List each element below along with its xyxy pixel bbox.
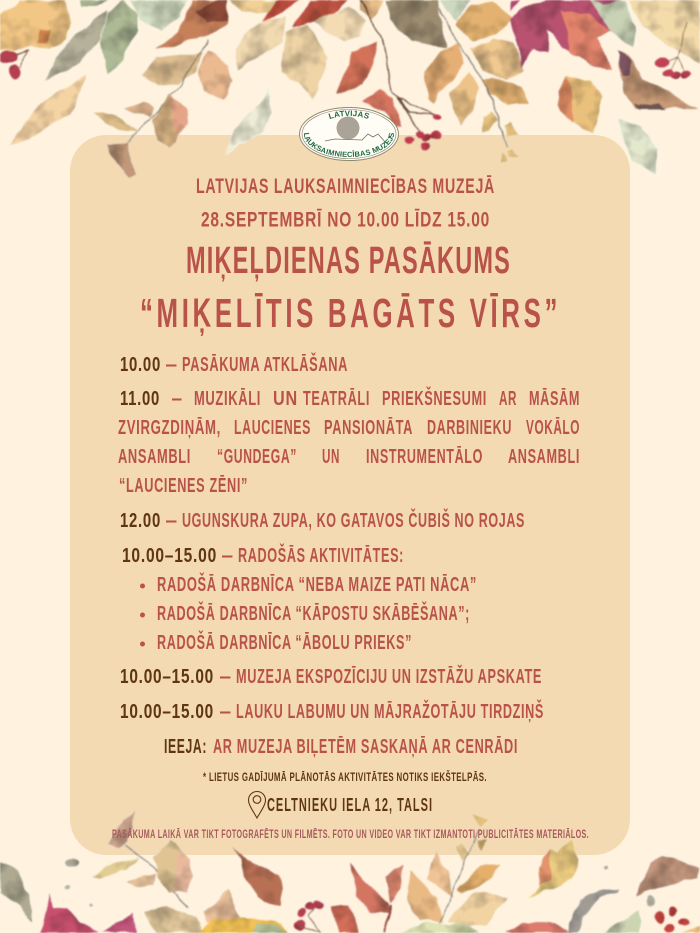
leaf: yellow red autumn — [552, 63, 602, 135]
decoration: top autumn leaves — [0, 0, 700, 177]
leaf: round on stem — [152, 95, 188, 148]
leaf: yellow bottom right — [528, 840, 578, 898]
leaf: rust — [155, 0, 228, 48]
leaf: green bottom right — [603, 912, 642, 933]
paint spots — [65, 859, 656, 908]
pumpkin: red — [503, 922, 567, 933]
programme item: 10.00 opening: — — [166, 354, 177, 376]
entry information: IEEJA: — [164, 736, 207, 758]
leaf: pale green right — [618, 118, 657, 175]
leaf: pink tan over panel — [107, 810, 135, 847]
programme item: 11.00 performances: DARBINIEKU — [427, 417, 512, 439]
leaf: sage green — [100, 0, 137, 75]
programme item: market: 10.00–15.00 — [120, 701, 214, 723]
stem: bottom left — [125, 843, 187, 908]
leaf: orange cluster — [455, 2, 513, 42]
programme item: 11.00 performances: — — [172, 388, 182, 410]
bullet list: workshops: RADOŠĀ DARBNĪCA “NEBA MAIZE PATI NĀCA” — [157, 572, 477, 596]
logo: museum emblem — [299, 107, 399, 161]
berries: bottom right — [656, 905, 688, 931]
stem: right branch — [440, 10, 507, 147]
programme item: 11.00 performances: PANSIONĀTA — [324, 417, 413, 439]
stem: centre branch — [360, 0, 433, 130]
leaf: tan top centre — [360, 0, 383, 18]
leaf: pale yellow left — [10, 75, 87, 147]
programme item: 11.00 performances: UN — [322, 446, 340, 468]
leaf: tan on stem — [143, 52, 202, 87]
leaf: pale green right of centre — [440, 0, 472, 20]
programme item: 10.00 opening: PASĀKUMA ATKLĀŠANA — [182, 352, 348, 376]
stem and berries: top right — [662, 23, 687, 75]
leaf: grey green bottom left — [0, 862, 33, 923]
programme item: 11.00 performances: TEATRĀLI — [303, 388, 370, 410]
leaf: brown purple — [230, 847, 283, 907]
programme item: market: — — [220, 701, 231, 723]
leaf: cream maple — [230, 0, 277, 13]
bullet list: workshops: RADOŠĀ DARBNĪCA “ĀBOLU PRIEKS” — [157, 630, 412, 654]
rain note: * LIETUS GADĪJUMĀ PLĀNOTĀS AKTIVITĀTES NOTIKS IEKŠTELPĀS. — [203, 769, 487, 784]
panel: programme background — [70, 135, 630, 855]
programme item: creative activities — [122, 543, 477, 654]
leaf: brown bottom right — [635, 855, 700, 896]
leaf: grey green — [45, 10, 107, 82]
leaf: tan bottom centre — [143, 905, 203, 933]
heading: date: 28.SEPTEMBRĪ NO 10.00 LĪDZ 15.00 — [201, 208, 490, 232]
programme item: 11.00 performances: 11.00 — [120, 388, 160, 410]
programme item: 11.00 performances: VOKĀLO — [526, 417, 580, 439]
programme item: 11.00 performances: MUZIKĀLI — [194, 388, 261, 410]
programme item: 11.00 performances: LAUCIENES — [234, 417, 311, 439]
pumpkin: yellow — [197, 917, 290, 933]
programme item: 11.00 performances: MĀSĀM — [529, 388, 580, 410]
leaf: magenta maple — [510, 0, 613, 70]
programme item: creative activities: 10.00–15.00 — [122, 545, 217, 567]
leaf: big pale orange right — [627, 0, 700, 63]
address: CELTNIEKU IELA 12, TALSI — [267, 795, 433, 815]
decoration: bottom autumn leaves — [0, 810, 700, 933]
leaf: brown small — [107, 143, 135, 177]
programme item: exhibitions — [120, 664, 542, 688]
programme item: 10.00 opening — [120, 352, 348, 376]
leaf: round bottom — [153, 840, 193, 893]
programme item: exhibitions: 10.00–15.00 — [120, 666, 214, 688]
programme item: 11.00 performances: INSTRUMENTĀLO — [366, 446, 483, 468]
berries: centre — [404, 114, 441, 150]
pumpkin: pale green — [400, 923, 480, 933]
programme item: exhibitions: — — [220, 666, 231, 688]
programme item: 11.00 performances — [118, 386, 580, 497]
berries: top left — [0, 52, 20, 80]
programme item: 11.00 performances: ANSAMBLI — [508, 446, 580, 468]
leaf: red top — [263, 0, 300, 22]
programme item: 11.00 performances: “GUNDEGA” — [217, 446, 297, 468]
programme item: 10.00 opening: 10.00 — [120, 354, 161, 376]
stem: bottom cluster — [440, 830, 478, 923]
programme item: 11.00 performances: AR — [499, 388, 517, 410]
programme item: 11.00 performances: “LAUCIENES ZĒNI” — [119, 475, 248, 497]
logo: arched name top: LATVIJAS — [328, 110, 370, 119]
programme item: creative activities: RADOŠĀS AKTIVITĀTES: — [238, 543, 404, 567]
bullet list: workshops: RADOŠĀ DARBNĪCA “KĀPOSTU SKĀBĒŠANA”; — [157, 601, 470, 625]
leaf: small tan — [93, 113, 140, 132]
programme item: 11.00 performances: PRIEKŠNESUMI — [382, 386, 487, 410]
programme item: 11.00 performances: UN — [273, 388, 298, 410]
leaf: red hanging — [337, 42, 377, 93]
programme item: 12.00 soup: — — [166, 510, 177, 532]
berries: bottom centre — [294, 901, 323, 930]
leaf: brown spotted — [618, 50, 698, 110]
pumpkin stem — [567, 890, 618, 933]
programme item: creative activities: — — [222, 545, 233, 567]
heading: museum: LATVIJAS LAUKSAIMNIECĪBAS MUZEJĀ — [196, 175, 495, 198]
bullet list: workshops — [140, 572, 477, 654]
leaf: orange bottom cluster — [407, 870, 443, 922]
leaf: pale translucent — [225, 85, 272, 155]
leaf: grey brown — [385, 0, 445, 47]
leaf: small tan bottom — [92, 857, 140, 878]
leaf: orange corner — [680, 925, 700, 933]
leaf: pale green — [130, 0, 187, 32]
leaf: green behind maple — [587, 0, 634, 47]
entry information — [164, 736, 518, 758]
leaf: orange top left — [0, 0, 73, 52]
icon: location pin — [248, 792, 266, 818]
programme item: 12.00 soup: 12.00 — [120, 510, 161, 532]
logo: arched name bottom: LAUKSAIMNIECĪBAS MUZEJS — [304, 132, 394, 157]
leaf: magenta bottom left — [40, 895, 100, 933]
leaf: peach on stem — [198, 50, 233, 100]
programme item: 11.00 performances: ZVIRGZDIŅĀM, — [118, 417, 221, 439]
title: event: MIĶEĻDIENAS PASĀKUMS — [186, 240, 511, 282]
programme item: market — [120, 699, 544, 723]
programme item: 12.00 soup — [120, 508, 525, 532]
entry information: AR MUZEJA BIĻETĒM SASKAŅĀ AR CENRĀDI — [213, 736, 518, 758]
logo: millstone — [336, 116, 360, 140]
stem: left branch — [127, 38, 207, 143]
programme item: 11.00 performances: ANSAMBLI — [118, 446, 191, 468]
leaf: red bottom — [330, 905, 358, 933]
